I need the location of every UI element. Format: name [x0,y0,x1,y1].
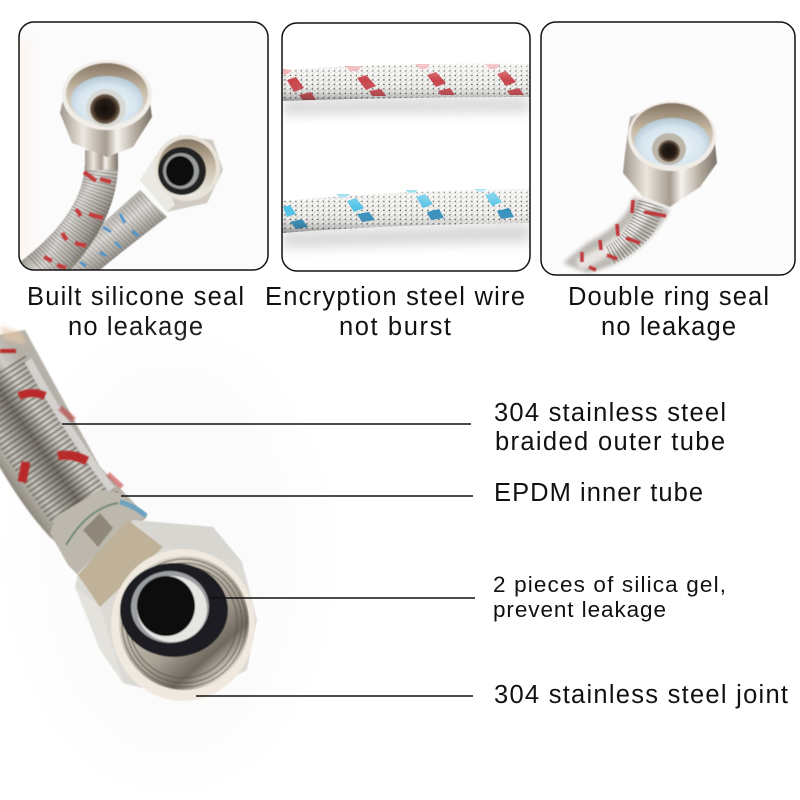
blue braided hose [282,189,530,233]
main photo: hose end close-up [0,323,258,702]
panel: double ring seal photo [541,22,795,275]
nut [623,101,717,207]
panel: built silicone seal photo [10,22,268,285]
caption: built silicone seal [27,283,244,341]
large nut [60,60,152,170]
label: 304 stainless steel braided outer tube: braided outer tube [495,428,725,456]
caption: double ring seal: no leakage [601,313,736,341]
label: 304 stainless steel braided outer tube [494,399,726,456]
braided tube [0,326,147,570]
ferrule collar [50,490,147,575]
label: 2 pieces of silica gel [493,572,726,622]
label: 304 stainless steel joint: 304 stainless steel joint [494,681,788,709]
hose shadows [282,97,530,115]
caption: encryption steel wire: Encryption steel wire [265,283,525,311]
red braid markings [0,351,122,487]
caption: encryption steel wire: not burst [339,313,451,341]
hex nut [75,520,257,701]
hose [563,197,670,273]
caption: double ring seal [568,283,769,341]
label: 304 stainless steel braided outer tube: 304 stainless steel [494,399,726,427]
leader line: EPDM inner tube [121,495,473,497]
red braided hose [282,64,530,101]
label: 2 pieces of silica gel: prevent leakage [493,597,666,622]
label: 2 pieces of silica gel: 2 pieces of silica gel, [493,572,726,597]
caption: encryption steel wire [265,283,525,341]
leader line: silica gel [210,597,475,599]
caption: built silicone seal: no leakage [68,313,203,341]
panel: encryption steel wire photo [282,23,530,271]
caption: built silicone seal: Built silicone seal [27,283,244,311]
leader line: stainless steel joint [196,695,473,697]
label: EPDM inner tube: EPDM inner tube [494,479,703,507]
caption: double ring seal: Double ring seal [568,283,769,311]
small nut [140,135,223,212]
red-striped hose [21,165,118,270]
blue-striped hose [72,190,168,270]
leader line: braided outer tube [62,423,471,425]
